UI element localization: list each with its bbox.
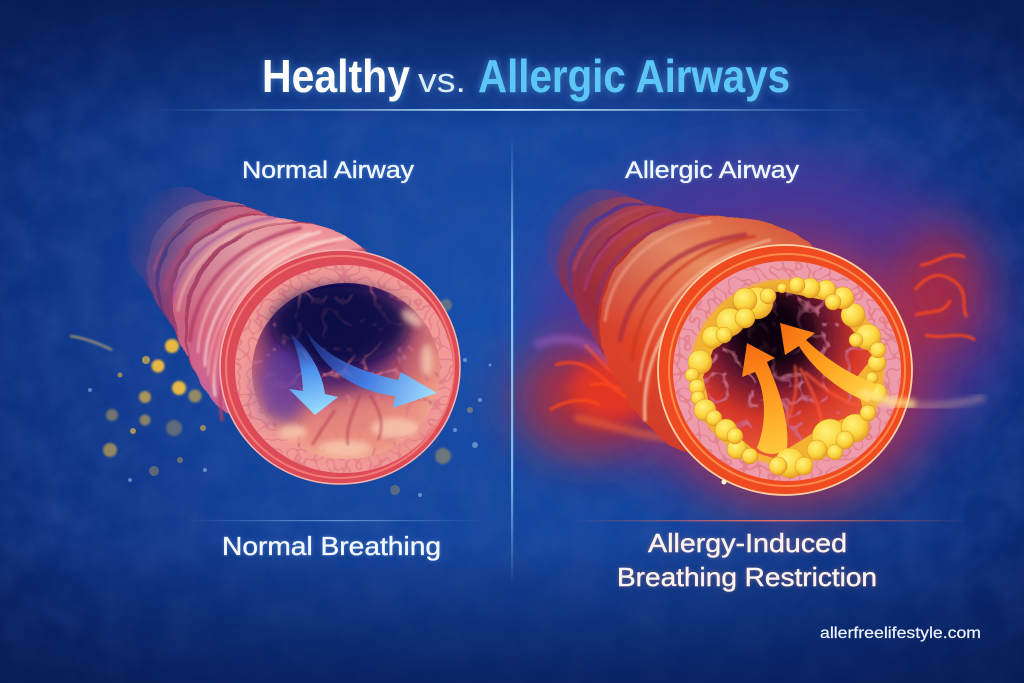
title: Healthy [262,50,410,102]
light streak across ring [860,392,915,404]
title: Allergic Airways [478,50,790,102]
tube body bands [545,189,814,452]
lumen [252,283,440,459]
title [262,50,790,102]
dark depth of lumen [732,299,812,371]
purple shadow lower left of lumen [257,347,309,423]
heading: normal airway: Normal Airway [242,157,414,184]
title: vs. [418,62,466,100]
divider under normal airway [185,520,485,521]
caption: allergy-induced breathing restriction: Breathing Restriction [617,562,877,592]
caption: normal breathing: Normal Breathing [222,531,441,561]
allergic airway tube [545,190,915,495]
pink lower tissue [303,397,427,453]
outer wall [220,250,460,484]
inflammation glow: right panel [515,155,1005,510]
radiating folds [312,360,420,445]
tube streaks [574,207,790,420]
lit tissue folds [279,306,433,456]
tube streaks [155,205,365,420]
lumen [703,292,873,458]
mucus blobs [685,277,887,478]
gold particles: left panel [70,299,473,495]
caption: allergy-induced breathing restriction: Allergy-Induced [648,528,847,558]
dark depth of lumen [272,287,408,363]
spark [722,480,726,484]
tube body bands [127,186,366,415]
red folds in lumen [775,365,860,440]
orange arrow: right [780,323,878,402]
blue arrow: long [306,330,437,408]
mucosa cell ring [673,261,901,481]
caption: allergy-induced breathing restriction [617,528,877,592]
orange arrow: left [742,343,787,454]
healthy airway tube [126,188,460,484]
mucosa cell ring [235,265,453,473]
outer wall [658,245,912,495]
blue arrow: short [289,333,338,415]
swollen yellow ring [690,279,884,465]
website credit: allerfreelifestyle.com [820,625,981,642]
divider under allergic airway [570,520,970,521]
center divider [511,135,513,585]
heading: allergic airway: Allergic Airway [625,157,799,184]
